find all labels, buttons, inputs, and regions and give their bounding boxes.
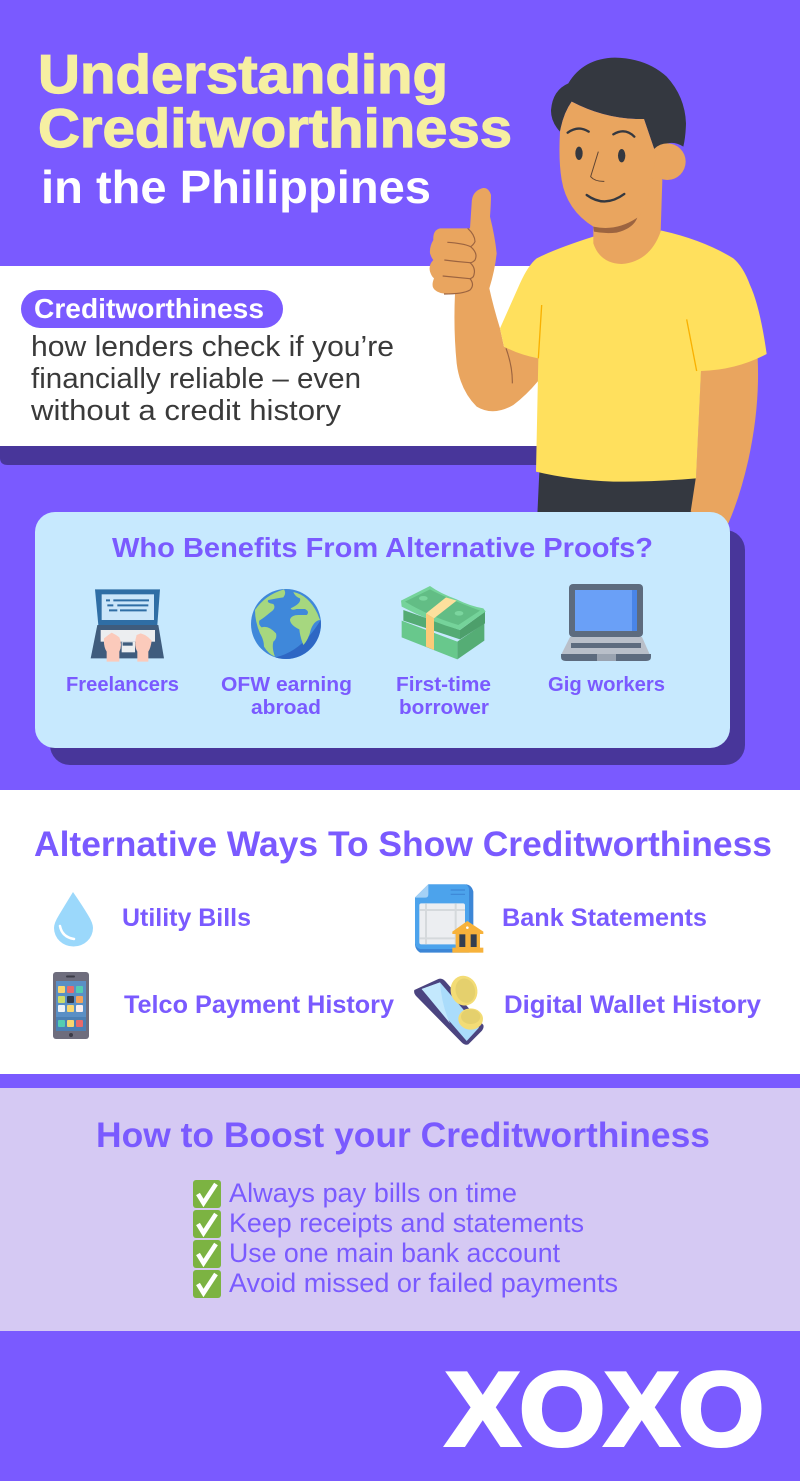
title — [38, 43, 512, 213]
section heading: Alternative Ways To Show Creditworthiness — [34, 825, 772, 864]
check item 2: Keep receipts and statements — [229, 1208, 584, 1238]
label: bank statements: Bank Statements — [502, 904, 707, 932]
raised arm and fist — [430, 188, 539, 411]
definition text: financially reliable – even — [31, 363, 361, 395]
icon: bank statement — [415, 884, 483, 953]
icon: stack of money — [401, 586, 486, 659]
label: first-time borrower: First-time — [396, 674, 491, 696]
label: gig workers: Gig workers — [548, 674, 665, 696]
ear — [649, 143, 686, 180]
label: telco payment history: Telco Payment History — [124, 991, 394, 1019]
panel: who benefits — [35, 512, 745, 765]
neck — [593, 157, 662, 264]
label: ofw earning abroad: OFW earning — [221, 674, 352, 696]
trousers — [537, 472, 697, 515]
panel heading: Who Benefits From Alternative Proofs? — [112, 532, 653, 563]
checklist — [193, 1178, 618, 1298]
icon: digital wallet — [414, 973, 484, 1045]
icon: freelancer laptop — [91, 589, 164, 662]
label: utility bills: Utility Bills — [122, 904, 251, 932]
facial features — [568, 129, 634, 201]
label: digital wallet history: Digital Wallet History — [504, 991, 761, 1019]
check item 4: Avoid missed or failed payments — [229, 1268, 618, 1298]
title: Understanding — [38, 43, 448, 105]
panel: how to boost — [0, 1088, 800, 1331]
icon: gig worker laptop — [561, 584, 651, 661]
neck shadow — [593, 218, 637, 233]
label: freelancers: Freelancers — [66, 674, 179, 696]
title: in the Philippines — [41, 161, 431, 213]
icon: smartphone — [53, 972, 89, 1039]
panel: definition band — [0, 266, 560, 465]
finger lines — [443, 228, 512, 383]
label: first-time borrower — [396, 674, 491, 719]
logo: XOXO — [446, 1352, 764, 1468]
shirt creases — [538, 305, 697, 371]
hair — [551, 58, 686, 153]
illustration: man giving thumbs up — [430, 58, 767, 523]
panel: alternative ways — [0, 790, 800, 1074]
definition text: how lenders check if you’re — [31, 331, 394, 363]
right arm — [691, 358, 758, 523]
label: first-time borrower: borrower — [399, 697, 489, 719]
definition text: without a credit history — [30, 395, 342, 427]
icon: water drop — [54, 892, 93, 946]
title: Creditworthiness — [38, 97, 512, 159]
definition label pill: Creditworthiness — [34, 293, 264, 324]
icon: globe — [251, 589, 321, 659]
section heading: How to Boost your Creditworthiness — [96, 1116, 710, 1155]
check item 1: Always pay bills on time — [229, 1178, 517, 1208]
label: ofw earning abroad: abroad — [251, 697, 321, 719]
label: ofw earning abroad — [221, 674, 352, 719]
t-shirt — [500, 231, 767, 482]
check item 3: Use one main bank account — [229, 1238, 560, 1268]
definition text — [30, 331, 394, 427]
face — [559, 102, 656, 229]
